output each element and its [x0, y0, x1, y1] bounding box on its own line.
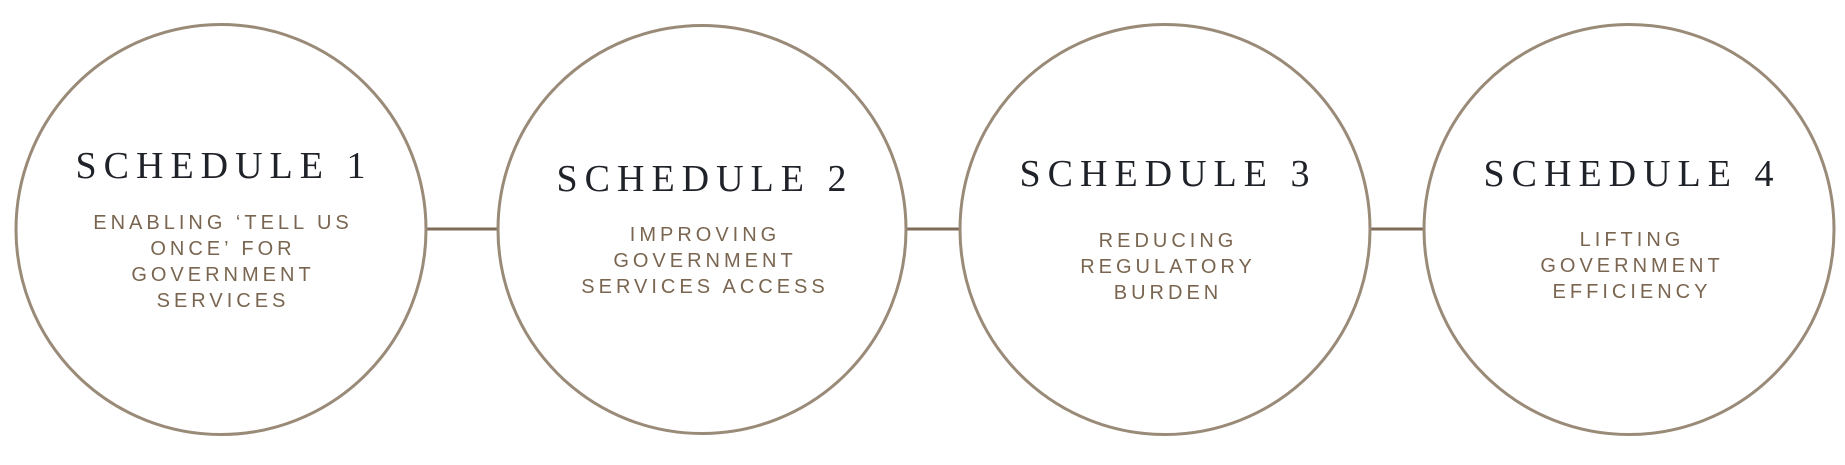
- text: schedule 1 description: ENABLING ‘TELL US: [93, 212, 353, 234]
- connector 2-3: [906, 228, 960, 230]
- text: schedule 1 description: GOVERNMENT: [131, 264, 315, 286]
- heading: schedule 4: SCHEDULE 4: [1484, 153, 1780, 195]
- connector 1-2: [426, 228, 498, 230]
- circle 3: [960, 24, 1370, 434]
- text: schedule 1 description: ONCE’ FOR: [150, 238, 296, 260]
- text: schedule 4 description: EFFICIENCY: [1553, 281, 1711, 303]
- heading: schedule 3: SCHEDULE 3: [1020, 153, 1316, 195]
- text: schedule 3 description: REDUCING: [1099, 230, 1237, 252]
- circle 4: [1424, 24, 1834, 434]
- text: schedule 2 description: IMPROVING: [630, 224, 780, 246]
- heading: schedule 1: SCHEDULE 1: [76, 145, 372, 187]
- text: schedule 3 description: [1080, 230, 1256, 304]
- text: schedule 2 description: SERVICES ACCESS: [581, 276, 829, 298]
- text: schedule 2 description: [581, 224, 829, 298]
- connector 3-4: [1370, 228, 1424, 230]
- heading: schedule 2: SCHEDULE 2: [557, 158, 853, 200]
- circle 1: [16, 24, 426, 434]
- text: schedule 1 description: [93, 212, 353, 312]
- text: schedule 3 description: REGULATORY: [1080, 256, 1256, 278]
- text: schedule 4 description: LIFTING: [1580, 229, 1684, 251]
- text: schedule 3 description: BURDEN: [1114, 282, 1222, 304]
- text: schedule 4 description: GOVERNMENT: [1540, 255, 1724, 277]
- circle 2: [498, 26, 906, 434]
- text: schedule 1 description: SERVICES: [157, 290, 289, 312]
- text: schedule 4 description: [1540, 229, 1724, 303]
- text: schedule 2 description: GOVERNMENT: [613, 250, 797, 272]
